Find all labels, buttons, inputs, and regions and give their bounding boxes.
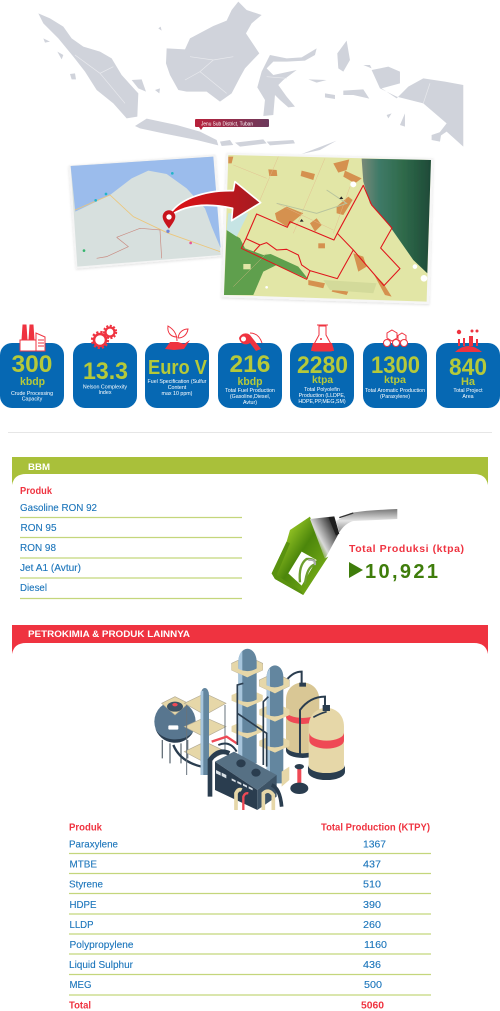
site map photo [221, 153, 433, 304]
road map photo [69, 154, 223, 269]
stat card: nelson complexity [73, 326, 137, 408]
stat card: polyolefin production: HDPE,PP,MEG,SM) [298, 399, 346, 405]
production table: 260 [363, 919, 381, 931]
product list: RON 95 [20, 522, 57, 534]
production table: Total Production (KTPY) [321, 822, 430, 834]
panel: BBM [12, 457, 488, 598]
stat card: crude processing capacity: Capacity [22, 396, 43, 402]
stat card: fuel specification: Euro V [148, 357, 208, 379]
product list: Jet A1 (Avtur) [20, 562, 81, 574]
panel: petrokimia [12, 625, 488, 1011]
production table: Paraxylene [69, 838, 118, 850]
pipes [237, 683, 268, 767]
stat card: fuel specification: Content [168, 385, 187, 391]
icon: hand with plant [165, 326, 190, 350]
stat card: fuel specification: max 10 ppm) [162, 391, 193, 397]
production table: 436 [363, 959, 381, 971]
stat card: fuel specification: Fuel Specification (Sulfur [148, 379, 207, 385]
divider [8, 432, 492, 434]
refinery illustration [154, 649, 345, 810]
icon: gears [92, 326, 116, 348]
stat card: crude processing capacity [0, 325, 64, 408]
stat card: total fuel production: Avtur) [243, 400, 257, 406]
stat card: nelson complexity: Nelson Complexity [83, 384, 127, 390]
heading: petrokimia: PETROKIMIA & PRODUK LAINNYA [28, 629, 190, 640]
stat card: total project area: Total Project [453, 388, 483, 394]
stat card: crude processing capacity: 300 [12, 351, 52, 378]
production table: 1160 [364, 939, 387, 951]
sphere tank [154, 697, 202, 767]
product list [20, 485, 242, 598]
arrow from road map to site map [163, 182, 261, 229]
product list: RON 98 [20, 542, 56, 554]
icon: refinery on hill [455, 330, 482, 352]
rear tank [286, 672, 319, 758]
icon: fuel pump nozzle [272, 509, 397, 595]
icon: hexagons [384, 330, 408, 346]
total production callout: Total Produksi (ktpa) [349, 543, 464, 555]
stat card: total project area: 840 [449, 354, 487, 381]
stat card: polyolefin production: 2280 [297, 352, 348, 379]
stat card: crude processing capacity: kbdp [20, 376, 45, 388]
stat card: total fuel production: (Gasoline,Diesel, [230, 394, 270, 400]
stat card: aromatic production: Total Aromatic Production [365, 388, 425, 394]
stat card: total fuel production: kbdp [238, 376, 263, 388]
stat card: aromatic production: 1300 [371, 352, 420, 379]
stat card: polyolefin production: Total Polyolefin [304, 387, 340, 393]
stat card: total fuel production: 216 [230, 351, 270, 378]
production table: Produk [69, 822, 102, 834]
production table [69, 822, 431, 1011]
control unit [210, 743, 282, 810]
production table: 437 [363, 858, 381, 870]
stat card: nelson complexity: 13.3 [83, 358, 128, 385]
production table: HDPE [70, 899, 96, 911]
stat card: aromatic production [363, 330, 427, 408]
total production callout [349, 543, 464, 583]
map: Indonesia [38, 2, 463, 154]
location label [195, 119, 269, 130]
production table: Liquid Sulphur [69, 959, 133, 971]
production table: 1367 [363, 838, 386, 850]
stat card: crude processing capacity: Crude Processing [11, 391, 53, 397]
production table: MEG [70, 979, 92, 991]
production table: LLDP [70, 919, 94, 931]
stat card: total project area: Area [462, 394, 474, 400]
product list: Gasoline RON 92 [20, 502, 97, 514]
production table: 510 [363, 878, 381, 890]
heading: BBM [12, 457, 488, 485]
stat card: aromatic production: ktpa [384, 374, 406, 386]
production table: Polypropylene [70, 939, 134, 951]
production table: MTBE [70, 858, 97, 870]
stat card: polyolefin production [290, 325, 354, 408]
front tank [290, 697, 345, 794]
stat card: nelson complexity: Index [99, 390, 112, 396]
tall column [232, 649, 263, 763]
heading: petrokimia [12, 625, 488, 654]
stat card: total project area [436, 330, 500, 408]
production table: 390 [363, 899, 381, 911]
product list: Diesel [20, 582, 47, 594]
stat card: fuel specification [145, 326, 209, 408]
icon: factory [20, 325, 45, 351]
heading: BBM: BBM [28, 462, 50, 473]
stat card: total fuel production: Total Fuel Production [225, 388, 275, 394]
stat card: total fuel production [218, 333, 282, 408]
product list: Produk [20, 485, 52, 497]
small column with platforms [184, 688, 237, 775]
icon: fuel nozzle [239, 333, 262, 351]
total production callout: 10,921 [365, 561, 438, 583]
stat card: polyolefin production: ktpa [312, 374, 333, 386]
production table: Styrene [69, 878, 103, 890]
second column [259, 665, 289, 787]
stat card: aromatic production: (Paraxylene) [380, 394, 410, 400]
stat card: polyolefin production: Production (LLDPE, [299, 393, 345, 399]
production table: 500 [364, 979, 382, 991]
stat card: total project area: Ha [461, 376, 476, 388]
icon: flask [311, 325, 334, 351]
location label: Jenu Sub District, Tuban [201, 122, 253, 128]
